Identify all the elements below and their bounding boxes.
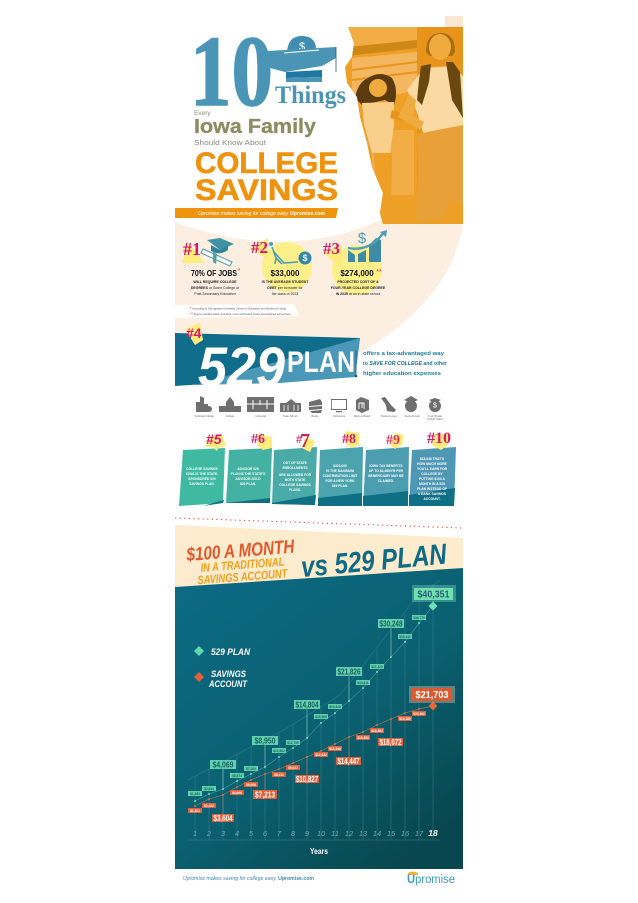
stems xyxy=(223,601,433,789)
card 5: SAVINGS PLAN. xyxy=(189,482,215,486)
tagline bar: Upromise makes saving for college easy. Upromise.com xyxy=(198,211,325,217)
icon: university xyxy=(247,397,274,418)
card 8: FOR A NEW YORK xyxy=(325,479,355,483)
x axis years: 15 xyxy=(387,829,396,838)
card 6: 529 PLAN. xyxy=(240,482,256,486)
heading: traditional savings account xyxy=(196,554,289,587)
heading: traditional savings account: IN A TRADITIONAL xyxy=(200,555,285,575)
fact 2: student debt: DEBT per borrower for xyxy=(267,286,304,290)
small labels: 529 plan: $7,200 xyxy=(246,767,256,771)
small labels: 529 plan xyxy=(188,615,426,796)
icon: college xyxy=(219,397,241,418)
small labels: 529 plan: $36,770 xyxy=(413,616,425,620)
heading: every Iowa family: Every xyxy=(194,110,211,117)
card 6: ADVISOR-SOLD xyxy=(235,477,261,481)
fact 3: cost of college: IN 2035 at an in-state school xyxy=(336,292,381,296)
icon: trade school xyxy=(280,399,301,418)
callout: savings total xyxy=(409,686,455,703)
text: plan description: to SAVE FOR COLLEGE and other xyxy=(363,361,448,367)
x axis years: 1 xyxy=(193,829,197,838)
card 10: ACCOUNT. xyxy=(423,497,441,501)
big labels: 529 plan: $30,248 xyxy=(380,620,403,628)
small labels: 529 plan: $10,802 xyxy=(273,749,285,753)
icon: university: University xyxy=(256,415,267,418)
x axis years: 4 xyxy=(235,829,239,838)
icon: trade school: Trade School xyxy=(283,415,298,418)
right kid xyxy=(426,33,455,56)
card 7: BOTH STATE xyxy=(285,478,306,482)
card 7: ENROLLMENTS xyxy=(282,466,308,470)
x axis years: 9 xyxy=(305,829,310,838)
badge: number 7: # xyxy=(296,432,302,446)
icon row: eligible expenses xyxy=(194,396,443,421)
small labels: 529 plan: $16,969 xyxy=(315,715,327,719)
legend: ACCOUNT xyxy=(208,679,248,690)
badge: number 6 xyxy=(251,432,272,450)
card 7 xyxy=(272,447,317,505)
fact 2: student debt: $ xyxy=(302,253,308,263)
fact 1: jobs: #1 xyxy=(183,239,201,259)
fact 1: jobs xyxy=(182,238,241,296)
legend: 529 PLAN xyxy=(211,647,251,658)
small labels: savings: $15,653 xyxy=(357,736,369,740)
fact 1: jobs: DEGREES or Some College or xyxy=(191,286,240,290)
x axis years xyxy=(193,828,438,838)
text: plan description: offers a tax-advantaged way xyxy=(363,351,445,357)
dots: savings xyxy=(194,702,438,807)
small labels: 529 plan: $1,283 xyxy=(190,792,200,796)
fact 3: cost of college xyxy=(323,230,387,296)
fact 2: student debt: the class of 2023 xyxy=(272,292,298,296)
icon: savings cap xyxy=(268,36,336,82)
left kid xyxy=(355,74,396,105)
fact 1: jobs: Post-Secondary Education xyxy=(194,292,236,296)
heading: college savings: SAVINGS xyxy=(195,174,338,207)
heading: every Iowa family: Iowa Family xyxy=(194,116,317,138)
x axis years: 6 xyxy=(263,829,268,838)
footer tagline: Upromise makes saving for college easy. Upromise.com xyxy=(183,876,314,882)
badge: number 5 xyxy=(206,431,226,451)
big labels: 529 plan: $21,826 xyxy=(338,668,361,676)
legend xyxy=(194,646,251,690)
small labels: savings: $9,622 xyxy=(288,766,298,770)
big labels: 529 plan: $8,950 xyxy=(254,736,276,746)
icon: student loans: Student Loans xyxy=(381,415,398,418)
small labels: 529 plan: $12,750 xyxy=(287,741,299,745)
card 10 xyxy=(409,447,456,506)
card 10: PUTTING $100 A xyxy=(419,477,446,481)
line: savings account xyxy=(195,706,433,806)
panel: 529 plan banner xyxy=(175,323,360,398)
card 6 xyxy=(226,448,272,503)
small labels: savings: $1,201 xyxy=(190,809,200,813)
icon: computer: Computers xyxy=(333,415,346,418)
fact 2: student debt: IS THE AVERAGE STUDENT xyxy=(262,280,309,284)
card 10: PLAN INSTEAD OF xyxy=(417,487,447,491)
fact 1: jobs: 70% OF JOBS xyxy=(191,269,238,278)
small labels: 529 plan: $19,320 xyxy=(329,705,341,709)
panel: 529 plan banner: PLAN xyxy=(287,346,355,379)
line: 529 plan xyxy=(195,606,433,801)
footnotes: ** Figure includes tuition and fees, room and board, books and required school fees xyxy=(190,311,291,316)
text: plan description xyxy=(363,351,448,377)
card 10: MONTH IN A 529 xyxy=(419,482,445,486)
heading: college savings: COLLEGE xyxy=(195,147,338,180)
small labels: savings: $12,032 xyxy=(315,753,327,757)
x axis years: 5 xyxy=(249,829,254,838)
footnotes xyxy=(175,304,299,318)
icon: technical college xyxy=(194,396,214,418)
heading: $100 a month: $100 A MONTH xyxy=(185,537,296,566)
badge: number 7 xyxy=(296,430,315,452)
panel: fact cards 5 to 10 xyxy=(179,430,456,506)
small labels: savings: $8,411 xyxy=(274,773,284,777)
x axis years: 7 xyxy=(277,829,282,838)
tagline bar xyxy=(175,208,338,218)
small labels: 529 plan: $24,411 xyxy=(357,681,369,685)
fact 3: cost of college: #3 xyxy=(323,239,340,258)
big labels: savings: $3,604 xyxy=(214,814,233,823)
small labels: savings xyxy=(188,711,426,813)
card 8: $420,000 xyxy=(333,464,347,468)
badge: number 5: #5 xyxy=(206,431,222,447)
card 7: ARE ALLOWED FOR xyxy=(279,473,312,477)
big labels: 529 plan: $14,804 xyxy=(296,700,319,710)
x axis years: 16 xyxy=(401,829,410,838)
icon: books: Books xyxy=(312,415,319,418)
small labels: 529 plan: $33,441 xyxy=(399,635,411,639)
small labels: savings: $6,008 xyxy=(246,783,256,787)
card 7: OUT OF STATE xyxy=(283,461,308,465)
card 10: COLLEGE BY xyxy=(421,472,444,476)
card 9: IOWA TAX BENEFITS xyxy=(369,464,403,468)
panel: growth chart xyxy=(175,568,463,869)
small labels: savings: $19,280 xyxy=(399,717,411,721)
big labels: savings: $7,213 xyxy=(255,790,275,800)
card 10: YOU'LL EARN FOR xyxy=(417,467,448,471)
small labels: savings: $20,492 xyxy=(413,712,425,716)
icon: college: College xyxy=(226,415,235,418)
big labels: 529 plan xyxy=(210,619,404,770)
heading: vs 529 plan: vs 529 PLAN xyxy=(300,539,449,584)
card 5: SPONSORED 529 xyxy=(188,477,216,481)
icon: rising bars with dollar: $ xyxy=(358,230,367,247)
card 6: PLAN IS THE STATE'S xyxy=(231,472,266,476)
card 8: 529 PLAN. xyxy=(332,484,348,488)
legend: SAVINGS xyxy=(211,669,247,680)
icon: K-12 tuition: School Tuition xyxy=(427,418,443,421)
card 7: COLLEGE SAVINGS xyxy=(279,483,312,487)
fact 1: jobs: * xyxy=(238,268,241,275)
x axis years: 10 xyxy=(317,829,326,838)
big labels: savings: $14,447 xyxy=(338,757,360,766)
heading: college savings xyxy=(195,147,338,207)
badge: number 4 xyxy=(185,323,203,345)
small labels: 529 plan: $5,574 xyxy=(232,774,242,778)
card 5: IOWA IS THE STATE- xyxy=(186,472,218,476)
dots: 529 plan xyxy=(194,602,438,802)
fact 1: jobs: WILL REQUIRE COLLEGE xyxy=(193,280,237,284)
icon: student loans xyxy=(381,397,398,418)
card 6: ADVISOR 529 xyxy=(237,467,259,471)
card 9: BENEFICIARY MAY BE xyxy=(368,474,405,478)
small labels: 529 plan: $27,220 xyxy=(371,665,383,669)
badge: number 10: #10 xyxy=(427,430,451,447)
dotted divider xyxy=(175,518,463,528)
card 7: PLANS. xyxy=(289,488,301,492)
callout: 529 total: $40,351 xyxy=(418,590,450,600)
card 5: COLLEGE SAVINGS xyxy=(186,467,219,471)
small labels: savings: $16,862 xyxy=(371,729,383,733)
card 8: IS THE MAXIMUM xyxy=(326,469,354,473)
big labels: savings: $10,827 xyxy=(296,775,318,784)
big labels: 529 plan: $4,069 xyxy=(212,760,234,770)
fact 3: cost of college: ** xyxy=(376,269,382,276)
icon: computer xyxy=(331,399,347,418)
fact 2: student debt xyxy=(250,238,312,296)
logo: Upromise: Upromise xyxy=(407,874,455,886)
card 9 xyxy=(363,447,409,506)
title: 10 Things: Things xyxy=(275,82,346,109)
chart grid xyxy=(188,580,440,840)
x axis years: 13 xyxy=(359,829,368,838)
icon: K-12 tuition: K-12 Private xyxy=(428,415,442,418)
card 5 xyxy=(179,448,225,506)
callout: 529 total xyxy=(412,585,456,602)
icon: graduation cap and diploma xyxy=(201,238,234,266)
x axis years: 14 xyxy=(373,829,381,838)
title: 10 Things: 10 xyxy=(190,15,273,127)
badge: number 7: 7 xyxy=(300,430,310,452)
card 10: HOW MUCH MORE xyxy=(417,462,448,466)
icon: K-12 tuition xyxy=(427,398,443,421)
peach corner tab xyxy=(445,16,463,28)
heading: every Iowa family xyxy=(194,110,317,147)
peach background swoosh xyxy=(175,221,463,352)
card 10: $18,648 THAT'S xyxy=(420,457,445,461)
axis title: Years xyxy=(310,846,328,856)
card 8 xyxy=(318,447,363,506)
x axis years: 8 xyxy=(291,829,296,838)
icon: person pulling debt xyxy=(269,242,312,264)
x axis years: 18 xyxy=(428,828,438,838)
fact 3: cost of college: FOUR-YEAR COLLEGE DEGREE xyxy=(331,286,386,290)
icon: study abroad xyxy=(404,396,420,418)
small labels: 529 plan: $2,634 xyxy=(204,787,214,791)
icon: technical college: Technical College xyxy=(194,415,214,418)
x axis years: 11 xyxy=(331,829,339,838)
panel: comparison header xyxy=(175,525,463,590)
photo: students running xyxy=(345,27,463,225)
card 9: UP TO $3,465/YR PER xyxy=(369,469,404,473)
icon: savings cap: $ xyxy=(299,41,305,53)
footnotes: * According to Georgetown University Center on Education and Workforce Study xyxy=(190,306,287,310)
heading: traditional savings account: SAVINGS ACCOUNT xyxy=(197,566,289,587)
icon: study abroad: Study Abroad xyxy=(404,415,420,418)
x axis years: 2 xyxy=(206,829,212,838)
card 9: CLAIMED. xyxy=(378,479,394,483)
icon: room and board: Room & Board xyxy=(354,415,371,418)
text: plan description: higher education expenses xyxy=(363,371,441,377)
small labels: savings: $13,240 xyxy=(329,747,341,751)
panel: 529 plan banner: 529 xyxy=(198,335,285,398)
fact 2: student debt: $33,000 xyxy=(271,269,300,278)
icon: books xyxy=(309,399,322,418)
callout: savings total: $21,703 xyxy=(416,689,449,701)
x axis years: 12 xyxy=(345,829,354,838)
fact 3: cost of college: PROJECTED COST OF A xyxy=(337,280,379,284)
icon: room and board xyxy=(354,397,371,418)
big labels: savings xyxy=(212,738,403,823)
heading: every Iowa family: Should Know About xyxy=(194,140,266,147)
badge: number 4: #4 xyxy=(186,325,202,341)
badge: number 6: #6 xyxy=(251,432,265,447)
card 8: CONTRIBUTION LIMIT xyxy=(323,474,357,478)
small labels: savings: $4,806 xyxy=(232,791,242,795)
big labels: savings: $18,072 xyxy=(380,738,402,747)
small labels: savings: $2,402 xyxy=(204,804,214,808)
badge: number 9: #9 xyxy=(386,433,400,448)
title: 10 Things xyxy=(190,15,346,127)
x axis years: 3 xyxy=(221,829,226,838)
badge: number 8: #8 xyxy=(342,432,356,447)
icon: K-12 tuition: $ xyxy=(433,402,437,410)
fact 3: cost of college: $274,000 xyxy=(340,269,374,278)
x axis years: 17 xyxy=(415,829,424,838)
fact 2: student debt: #2 xyxy=(251,238,268,257)
card 10: A BANK SAVINGS xyxy=(418,492,447,496)
